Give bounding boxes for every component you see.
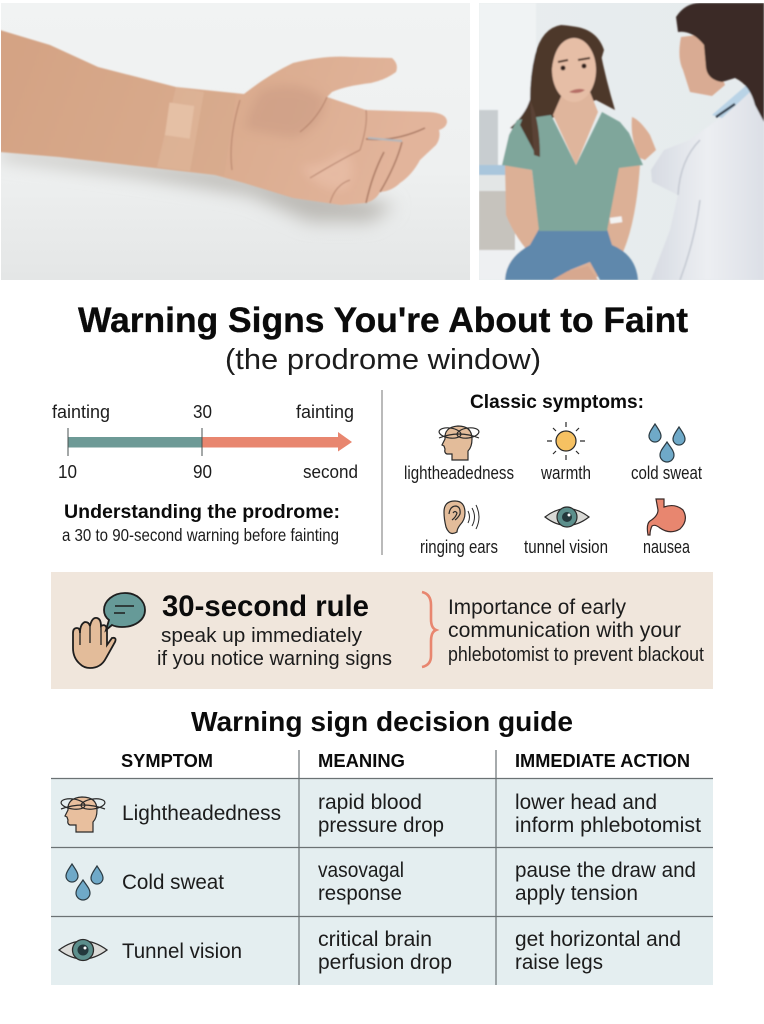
timeline caption: a 30 to 90-second warning before fainting <box>62 525 339 545</box>
icon: raised hand with speech bubble <box>73 593 145 668</box>
row: cold sweat: apply tension <box>515 881 638 905</box>
timeline top labels: 30 <box>193 402 212 422</box>
row: tunnel vision <box>59 927 681 974</box>
label: ringing ears: ringing ears <box>420 537 498 557</box>
row: cold sweat <box>66 858 696 905</box>
row: cold sweat: pause the draw and <box>515 858 696 882</box>
subtitle: (the prodrome window) <box>225 344 541 376</box>
callout instruction: speak up immediately <box>161 624 363 647</box>
icon: ringing ear <box>444 501 479 534</box>
patient arms <box>505 165 640 280</box>
row: lightheadedness: inform phlebotomist <box>515 813 701 837</box>
patient shirt <box>502 112 643 231</box>
doctor face and collar <box>679 35 725 96</box>
timeline top labels <box>52 402 354 422</box>
timeline top labels: fainting <box>296 402 354 422</box>
callout heading: 30-second rule <box>162 590 369 623</box>
photo: bandaged wrist and open hand <box>0 3 470 280</box>
label: nausea: nausea <box>643 537 691 557</box>
doctor coat <box>651 84 764 280</box>
brace <box>422 592 436 667</box>
doctor hand on shoulder <box>632 117 656 160</box>
timeline top labels: fainting <box>52 402 110 422</box>
title: Warning Signs You're About to Faint <box>78 301 688 340</box>
patient jeans <box>505 229 638 280</box>
icon: cold sweat drops <box>649 424 685 462</box>
row: lightheadedness <box>60 790 701 837</box>
callout instruction: if you notice warning signs <box>157 647 392 670</box>
table header: MEANING <box>318 750 405 771</box>
row: lightheadedness: pressure drop <box>318 813 444 837</box>
icon: tunnel vision eye <box>545 507 589 527</box>
callout explanation: Importance of early <box>448 596 626 619</box>
row: tunnel vision: raise legs <box>515 950 603 974</box>
row: cold sweat: Cold sweat <box>122 870 224 894</box>
row: tunnel vision: critical brain <box>318 927 432 951</box>
row: cold sweat: response <box>318 881 402 905</box>
table header: SYMPTOM <box>121 750 213 771</box>
timeline arrow bar <box>68 428 352 456</box>
callout explanation: phlebotomist to prevent blackout <box>448 644 704 666</box>
timeline bottom labels: 90 <box>193 462 212 482</box>
row: lightheadedness: Lightheadedness <box>122 801 281 825</box>
icon: lightheadedness head <box>438 426 480 460</box>
row: tunnel vision: get horizontal and <box>515 927 681 951</box>
label: lightheadedness: lightheadedness <box>404 463 514 483</box>
patient hair back <box>510 24 616 130</box>
icon: nausea stomach <box>647 499 685 535</box>
timeline bottom labels: 10 <box>58 462 77 482</box>
row: lightheadedness: lower head and <box>515 790 657 814</box>
label: cold sweat: cold sweat <box>631 463 702 483</box>
row: lightheadedness: rapid blood <box>318 790 422 814</box>
row: tunnel vision: perfusion drop <box>318 950 452 974</box>
heading: decision guide: Warning sign decision guide <box>191 706 573 737</box>
table header: IMMEDIATE ACTION <box>515 750 690 771</box>
panel: prodrome timeline <box>52 402 358 545</box>
callout explanation: communication with your <box>448 619 681 642</box>
panel: 30-second rule callout <box>51 572 713 689</box>
timeline heading: Understanding the prodrome: <box>64 501 340 523</box>
row: tunnel vision: Tunnel vision <box>122 939 242 963</box>
row: cold sweat: vasovagal <box>318 858 404 882</box>
table: warning sign decision guide <box>51 750 713 985</box>
patient neck and face <box>553 92 598 165</box>
table header <box>121 750 690 771</box>
label: warmth: warmth <box>540 463 591 483</box>
callout explanation <box>448 596 704 666</box>
timeline bottom labels: second <box>303 462 358 482</box>
photo: anxious patient with doctor <box>479 3 764 280</box>
icon: warmth sun <box>547 422 585 460</box>
timeline bottom labels <box>58 462 358 482</box>
label: tunnel vision: tunnel vision <box>524 537 608 557</box>
doctor hair <box>676 3 764 122</box>
panel: classic symptoms <box>404 391 702 557</box>
callout instruction <box>157 624 392 670</box>
symptoms heading: Classic symptoms: <box>470 391 644 413</box>
